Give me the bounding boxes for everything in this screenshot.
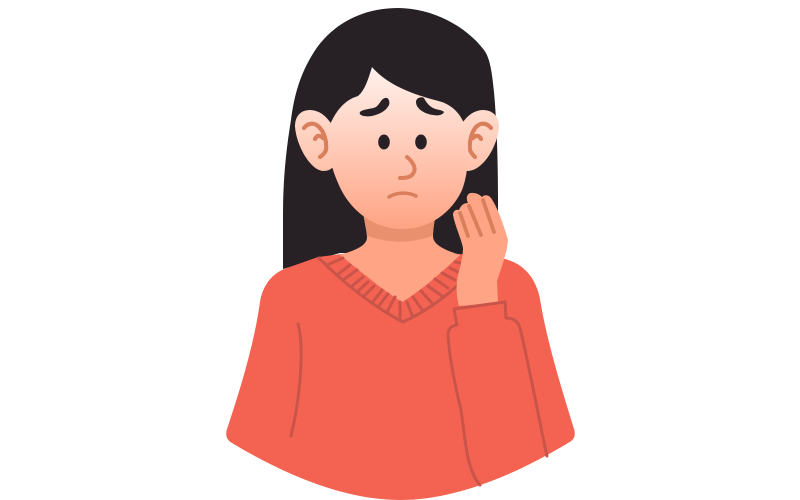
sweater body xyxy=(226,250,575,500)
left eye xyxy=(378,134,390,150)
right ear xyxy=(455,110,499,171)
sleeve xyxy=(448,302,547,485)
right eyebrow xyxy=(416,97,444,115)
neck xyxy=(340,210,460,302)
hand xyxy=(453,193,508,306)
mouth xyxy=(389,193,416,197)
left ear xyxy=(295,110,338,171)
illustration: worried woman touching her neck xyxy=(226,8,575,500)
sweater fold left xyxy=(291,324,301,436)
collar ribbing xyxy=(319,258,460,322)
face xyxy=(328,67,468,229)
hair xyxy=(283,8,498,269)
right eye xyxy=(415,134,427,150)
neck shadow xyxy=(364,216,435,242)
nose xyxy=(400,157,415,178)
left eyebrow xyxy=(360,98,389,116)
